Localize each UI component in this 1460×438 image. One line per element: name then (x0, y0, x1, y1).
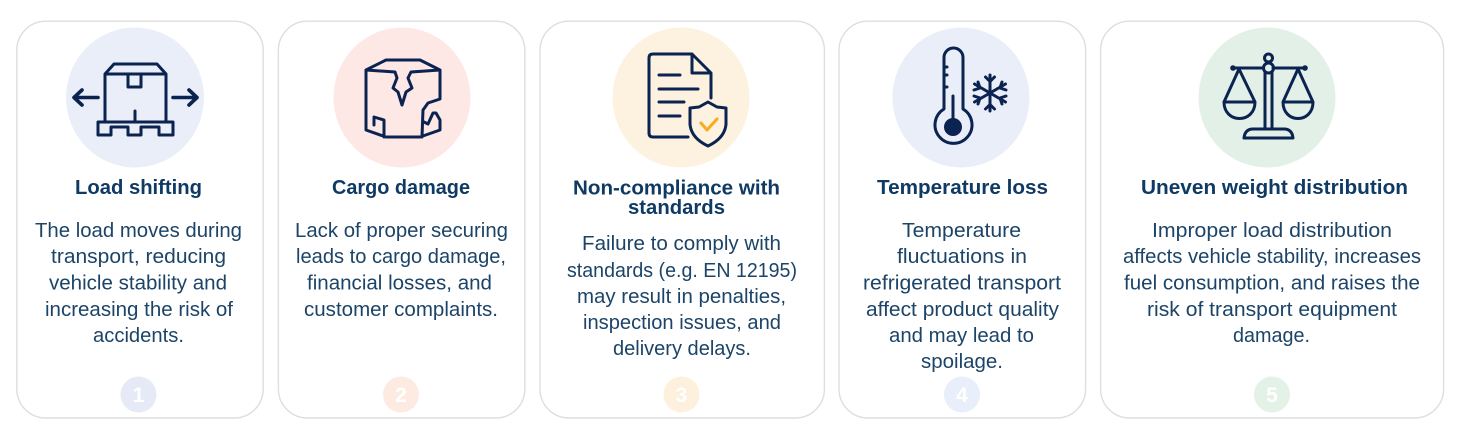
panel: non-compliance with standards (540, 21, 824, 418)
text: non-compliance description: Failure to comply with (582, 232, 781, 255)
heading: temperature loss: Temperature loss (877, 177, 1048, 199)
text: temperature loss description: and may lead to (889, 324, 1034, 347)
text: non-compliance description (567, 232, 797, 360)
text: temperature loss description: affect product quality (866, 298, 1060, 321)
text: cargo damage description: financial losses, and (307, 272, 492, 294)
text: cargo damage description: customer complaints. (304, 298, 498, 321)
panel: temperature loss (839, 21, 1086, 418)
badge: 3: 3 (676, 384, 687, 407)
text: load shifting description: vehicle stability and (49, 272, 227, 294)
text: temperature loss description: spoilage. (921, 350, 1003, 373)
text: temperature loss description (863, 219, 1061, 373)
heading: non-compliance with standards: standards (628, 197, 725, 219)
heading: non-compliance with standards: Non-compliance with (573, 178, 780, 200)
icon: damaged box (334, 28, 470, 168)
text: uneven weight description: risk of transport equipment (1147, 298, 1397, 321)
panel: uneven weight distribution (1101, 21, 1444, 418)
text: uneven weight description: Improper load distribution (1152, 219, 1392, 242)
badge: 5: 5 (1266, 384, 1278, 407)
badge: 1: 1 (133, 384, 145, 407)
text: load shifting description: accidents. (93, 324, 184, 347)
badge: 2 (383, 376, 419, 412)
text: load shifting description: The load moves during (35, 219, 242, 242)
panel: cargo damage (278, 21, 525, 418)
text: temperature loss description: fluctuations in (897, 245, 1027, 268)
text: uneven weight description (1123, 219, 1421, 347)
badge: 4: 4 (956, 384, 968, 407)
text: temperature loss description: refrigerated transport (863, 272, 1061, 294)
panel: load shifting (17, 21, 263, 418)
text: load shifting description: increasing the risk of (45, 298, 233, 321)
heading: cargo damage: Cargo damage (332, 177, 470, 199)
badge: 5 (1254, 376, 1290, 412)
heading: load shifting: Load shifting (75, 177, 202, 199)
icon: document with shield (612, 28, 750, 168)
text: load shifting description (35, 219, 242, 347)
text: cargo damage description: leads to cargo damage, (296, 245, 506, 268)
text: non-compliance description: delivery delays. (613, 337, 751, 360)
text: cargo damage description: Lack of proper securing (295, 219, 508, 242)
heading: non-compliance with standards (573, 178, 780, 219)
text: non-compliance description: may result in penalties, (577, 285, 786, 308)
badge: 1 (120, 376, 156, 412)
text: uneven weight description: damage. (1233, 324, 1310, 347)
text: non-compliance description: standards (e.g. EN 12195) (567, 259, 797, 282)
icon: thermometer and snowflake (892, 28, 1030, 168)
badge: 3 (664, 376, 700, 412)
text: cargo damage description (295, 219, 508, 321)
text: uneven weight description: fuel consumption, and raises the (1124, 272, 1420, 294)
text: load shifting description: transport, reducing (51, 245, 226, 268)
icon: balance scale (1198, 28, 1336, 168)
badge: 2: 2 (395, 384, 407, 407)
icon: box on pallet with arrows (66, 28, 204, 168)
badge: 4 (944, 376, 980, 412)
heading: uneven weight distribution: Uneven weight distribution (1141, 177, 1408, 199)
text: temperature loss description: Temperature (902, 219, 1021, 242)
text: non-compliance description: inspection issues, and (583, 311, 781, 334)
text: uneven weight description: affects vehicle stability, increases (1123, 245, 1421, 268)
